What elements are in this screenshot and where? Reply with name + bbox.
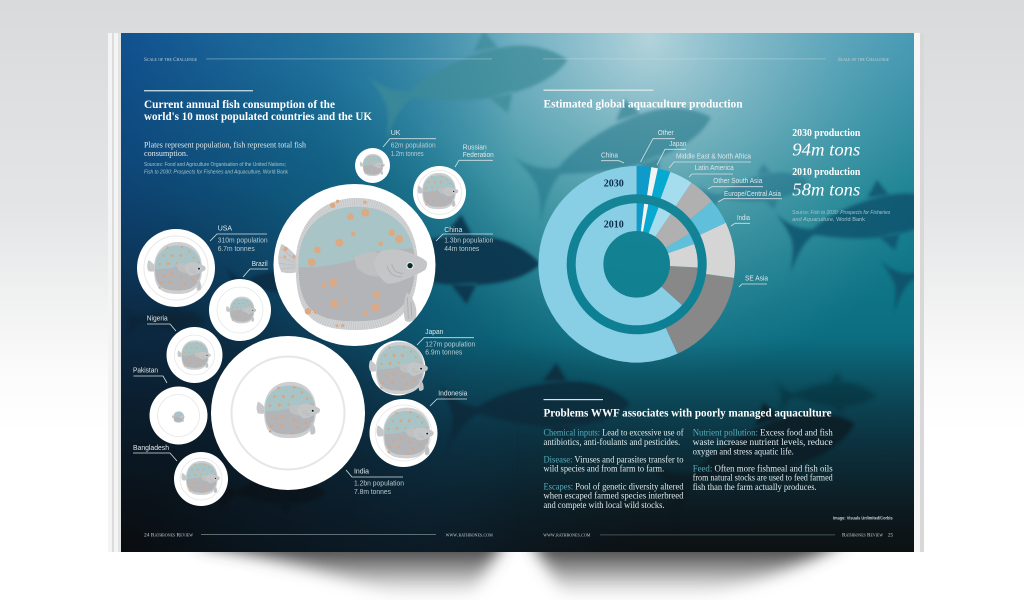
heading: fish consumption xyxy=(144,90,372,123)
text: nutrient pollution: waste increase nutrient levels, reduce xyxy=(693,437,833,447)
stat: 2030 production: 2030 production xyxy=(792,128,861,139)
heading: fish consumption: Current annual fish consumption of the xyxy=(144,99,335,111)
magazine shadow xyxy=(192,552,849,597)
text: nutrient pollution: Nutrient pollution: Excess food and fish xyxy=(693,427,833,437)
paper edges xyxy=(108,33,924,552)
production source: and Aquaculture , World Bank xyxy=(792,217,866,223)
text: disease xyxy=(544,454,684,474)
label: Latin America: Latin America xyxy=(695,165,734,172)
label: UK xyxy=(383,130,436,158)
ring gap and centre xyxy=(571,199,702,330)
plate: UK xyxy=(355,148,390,183)
footer right: Rathbones Review xyxy=(842,532,883,538)
label: Japan slice: Japan xyxy=(669,141,686,148)
label: Russian Federation: Russian xyxy=(463,145,487,152)
plate: China xyxy=(274,184,436,346)
label: SE Asia xyxy=(739,276,768,287)
label: India: India xyxy=(354,469,369,476)
text: escapes: and compete with local wild stocks. xyxy=(544,500,664,510)
label: Japan: 6.9m tonnes xyxy=(425,350,463,357)
text: feed xyxy=(693,464,833,492)
intro text: consumption. xyxy=(144,148,188,158)
plate: Russian Federation xyxy=(413,166,466,219)
text: disease: Disease: Viruses and parasites transfer to xyxy=(544,454,684,464)
stat: 2010 production: 2010 production xyxy=(792,167,861,178)
label: USA: 310m population xyxy=(218,238,268,245)
label: Other: Other xyxy=(658,130,674,137)
plate: Pakistan xyxy=(150,386,208,444)
label: Other South Asia: Other South Asia xyxy=(713,178,762,185)
inner ring: 2010 xyxy=(570,198,703,331)
stat: 2030 production: 94m tons xyxy=(792,140,860,160)
text: chemical inputs: antibiotics, anti-foulants and pesticides. xyxy=(544,437,680,447)
footer right xyxy=(543,532,893,538)
tuna silhouettes xyxy=(224,33,914,509)
plate: Bangladesh xyxy=(174,452,228,506)
stat: 2030 production xyxy=(792,128,861,160)
sources: Fish to 2030: Prospects for Fisheries and Aquaculture, World Bank xyxy=(144,170,288,176)
heading: fish consumption: world's 10 most populated countries and the UK xyxy=(144,111,372,123)
heading: problems: Problems WWF associates with poorly managed aquaculture xyxy=(544,406,832,420)
label: China: 44m tonnes xyxy=(444,246,480,253)
image credit: Image: Visuals Unlimited/Corbis xyxy=(833,516,893,521)
label: China slice: China xyxy=(601,153,618,160)
label: UK: UK xyxy=(391,130,401,137)
label: Brazil: Brazil xyxy=(252,261,268,268)
label: India: 7.8m tonnes xyxy=(354,489,391,496)
plate: Japan xyxy=(369,340,428,396)
label: UK: 1.2m tonnes xyxy=(391,151,424,158)
footer right: www.rathbones.com xyxy=(543,532,591,538)
footer left xyxy=(144,532,493,538)
label: Japan: 127m population xyxy=(425,342,475,349)
running header right: Scale of the Challenge xyxy=(838,57,890,63)
label: India xyxy=(346,469,404,496)
label: China: China xyxy=(444,227,462,234)
label: India slice: India xyxy=(737,215,750,222)
plate: Brazil xyxy=(209,279,271,341)
text: disease: wild species and from farm to farm. xyxy=(544,464,664,474)
text: nutrient pollution xyxy=(693,427,833,456)
label: Middle East and North Africa xyxy=(669,154,751,168)
text: chemical inputs xyxy=(544,427,684,447)
year label: 2010: 2010 xyxy=(604,220,624,230)
plate: Indonesia xyxy=(370,399,438,467)
label: Bangladesh: Bangladesh xyxy=(133,445,169,452)
production source xyxy=(792,210,891,223)
label: China: 1.3bn population xyxy=(444,238,493,245)
year label: 2030: 2030 xyxy=(604,178,624,190)
label: USA: 6.7m tonnes xyxy=(218,246,255,253)
label: Other South Asia xyxy=(708,178,763,189)
production source: Source: Fish to 2030: Prospects for Fisheries xyxy=(792,210,891,216)
sources: Sources: Food and Agriculture Organisation of the United Nations; xyxy=(144,162,286,168)
label: USA: USA xyxy=(218,226,232,233)
plate: USA xyxy=(137,229,215,307)
plate: Nigeria xyxy=(166,327,222,383)
text: feed: fish than the farm actually produces. xyxy=(693,482,817,492)
donut chart: aquaculture production by region xyxy=(518,146,755,383)
label: Bangladesh xyxy=(133,445,177,461)
label: Russian Federation xyxy=(455,145,494,167)
label: Japan slice xyxy=(657,141,686,165)
label: India slice xyxy=(731,215,750,226)
intro text: Plates represent population, fish represent total fish xyxy=(144,140,307,150)
label: USA xyxy=(210,226,268,253)
heading: aquaculture production: Estimated global aquaculture production xyxy=(544,98,743,110)
footer left: 24 Rathbones Review xyxy=(144,532,193,538)
running header left: Scale of the Challenge xyxy=(144,57,198,63)
label: Europe/Central Asia xyxy=(718,191,782,202)
label: India: 1.2bn population xyxy=(354,481,404,488)
label: Europe/Central Asia: Europe/Central Asia xyxy=(724,191,781,198)
label: Indonesia: Indonesia xyxy=(438,391,467,398)
intro text xyxy=(144,140,307,158)
footer left: www.rathbones.com xyxy=(446,532,493,538)
label: Other xyxy=(640,130,675,162)
text: nutrient pollution: oxygen and stress aquatic life. xyxy=(693,446,794,456)
label: Latin America xyxy=(689,165,734,177)
label: SE Asia: SE Asia xyxy=(745,276,768,283)
text: chemical inputs: Chemical inputs: Lead to excessive use of xyxy=(544,427,684,437)
text: escapes xyxy=(544,481,684,510)
stat: 2010 production: 58m tons xyxy=(792,179,860,199)
label: UK: 62m population xyxy=(391,143,436,150)
label: Middle East and North Africa: Middle East & North Africa xyxy=(676,154,751,161)
stat: 2010 production xyxy=(792,167,861,199)
magazine spread: underwater photograph xyxy=(121,33,914,552)
text: escapes: Escapes: Pool of genetic diversity altered xyxy=(544,481,684,491)
text: feed: Feed: Often more fishmeal and fish oils xyxy=(693,464,833,474)
label: Indonesia xyxy=(430,391,467,406)
plate: India xyxy=(211,336,365,490)
label: Pakistan: Pakistan xyxy=(133,368,158,375)
outer ring: 2030 xyxy=(518,146,755,383)
text: escapes: when escaped farmed species interbreed xyxy=(544,491,684,501)
label: Nigeria xyxy=(147,316,176,331)
label: Pakistan xyxy=(133,368,167,383)
label: China xyxy=(436,227,493,253)
label: Japan: Japan xyxy=(425,329,443,336)
label: Russian Federation: Federation xyxy=(463,152,494,159)
label: China slice xyxy=(601,153,624,163)
label: Brazil xyxy=(243,261,268,277)
sources xyxy=(144,162,288,176)
text: feed: from natural stocks are used to feed farmed xyxy=(693,473,833,483)
label: Nigeria: Nigeria xyxy=(147,316,168,323)
footer right: 25 xyxy=(888,532,893,538)
label: Japan xyxy=(417,329,475,357)
